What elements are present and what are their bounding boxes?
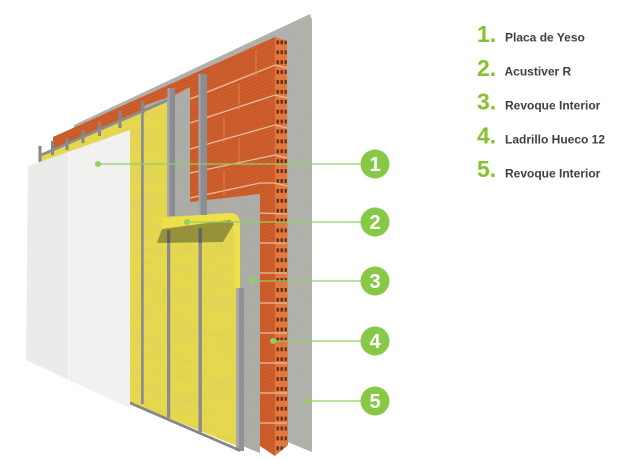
legend item 2: 2.: [477, 55, 496, 81]
panel: interior plaster layer: [143, 87, 260, 453]
callout 5: 5: [369, 391, 381, 413]
callout 4: 4: [369, 331, 381, 353]
legend item 2: [477, 55, 572, 81]
legend item 3: Revoque Interior: [505, 98, 601, 112]
legend item 1: 1.: [477, 21, 496, 47]
panel: hollow brick wall: [53, 37, 288, 456]
panel: metal studs: [38, 74, 244, 452]
callout 1: 1: [369, 154, 381, 176]
legend item 1: Placa de Yeso: [505, 30, 585, 44]
legend item 4: 4.: [477, 122, 496, 148]
callout 2: 2: [369, 212, 381, 234]
legend item 2: Acustiver R: [504, 64, 572, 78]
legend item 1: [477, 21, 585, 47]
legend item 4: Ladrillo Hueco 12: [505, 132, 605, 146]
callout 2: [184, 208, 390, 236]
panel: glass wool insulation: [40, 102, 240, 446]
panel: exterior plaster layer: [74, 14, 312, 452]
legend item 5: [477, 156, 601, 182]
callout 3: 3: [369, 271, 381, 293]
panel: gypsum board: [26, 130, 130, 408]
legend item 3: [477, 88, 601, 114]
callout 4: [270, 326, 390, 356]
legend item 5: Revoque Interior: [505, 166, 601, 180]
legend item 4: [477, 122, 605, 148]
legend item 3: 3.: [477, 88, 496, 114]
callout 1: [95, 150, 390, 178]
callout 5: [303, 386, 390, 416]
panel: insulation folded flap: [157, 220, 234, 243]
callout 3: [249, 266, 390, 296]
legend: [477, 21, 605, 182]
legend item 5: 5.: [477, 156, 496, 182]
